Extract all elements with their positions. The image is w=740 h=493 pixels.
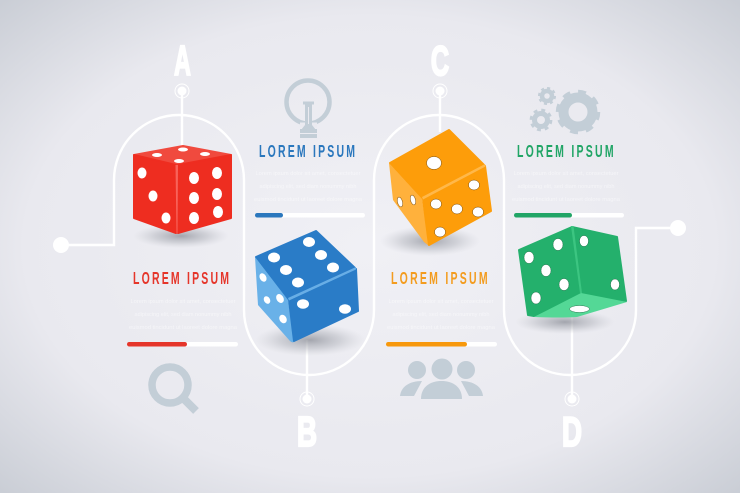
panel: red text: LOREM IPSUM	[133, 269, 229, 289]
panel: orange text	[386, 269, 497, 346]
panel: blue text	[254, 142, 365, 218]
panel: green text	[512, 142, 624, 218]
connecting line	[61, 91, 678, 398]
letter D: D	[562, 408, 582, 455]
red die	[134, 146, 231, 233]
panel: red text: adipiscing elit, sed diam nonummy nibh	[134, 312, 232, 318]
blue die	[255, 231, 358, 342]
panel: orange text: euismod tincidunt ut laoreet dolore magna	[387, 325, 495, 331]
panel: orange text: adipiscing elit, sed diam nonummy nibh	[392, 312, 490, 318]
panel: orange text: LOREM IPSUM	[391, 269, 488, 289]
start and end nodes	[53, 220, 686, 253]
icon: magnifier	[152, 367, 196, 411]
icon: people	[400, 358, 483, 399]
panel: red text: euismod tincidunt ut laoreet dolore magna	[129, 325, 237, 331]
panel: green text: LOREM IPSUM	[517, 142, 614, 162]
panel: blue text: LOREM IPSUM	[259, 142, 355, 162]
panel: orange text: Lorem ipsum dolor sit amet, consectetuer	[388, 299, 494, 305]
panel: blue text: euismod tincidunt ut laoreet dolore magna	[254, 197, 362, 203]
die shadows	[133, 224, 615, 356]
panel: red text: Lorem ipsum dolor sit amet, consectetuer	[130, 299, 236, 305]
letter C: C	[431, 39, 449, 85]
icon: light bulb	[286, 80, 330, 138]
panel: blue text: adipiscing elit, sed diam nonummy nibh	[260, 184, 357, 190]
node markers	[175, 84, 579, 406]
letter A: A	[174, 38, 191, 85]
panel: green text: adipiscing elit, sed diam nonummy nibh	[518, 184, 615, 190]
letter B: B	[297, 408, 317, 455]
icon: gears	[531, 88, 598, 132]
green die	[519, 226, 627, 318]
panel: blue text: Lorem ipsum dolor sit amet, consectetuer	[256, 171, 361, 177]
panel: green text: Lorem ipsum dolor sit amet, consectetuer	[514, 171, 619, 177]
panel: green text: euismod tincidunt ut laoreet dolore magna	[512, 197, 620, 203]
panel: red text	[127, 269, 238, 346]
orange die	[389, 130, 491, 246]
